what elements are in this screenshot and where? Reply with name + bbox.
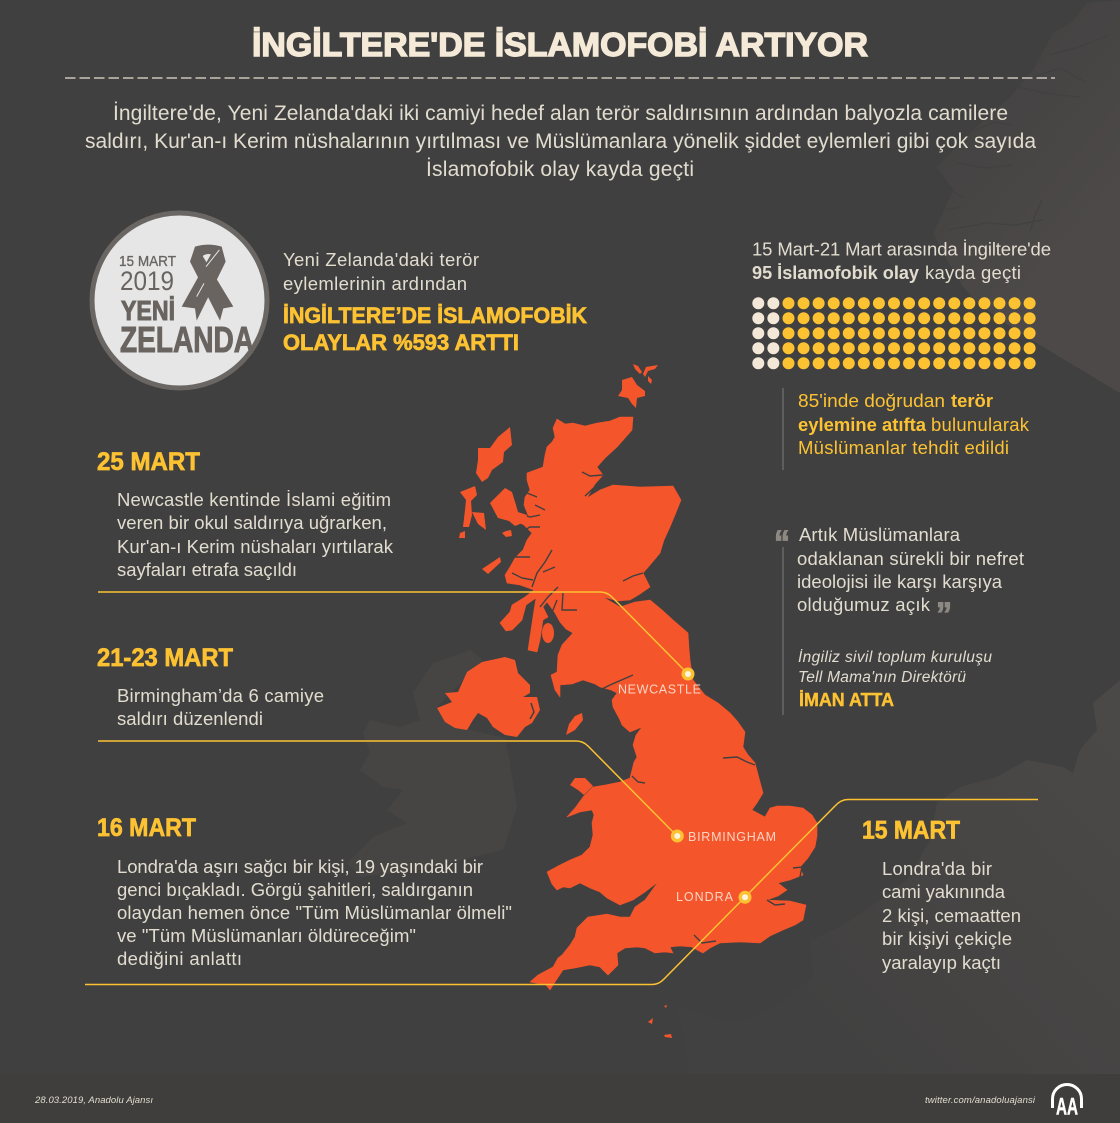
icon: opening quote mark: “ bbox=[774, 524, 790, 562]
map: Channel Islands bbox=[648, 1005, 672, 1038]
background map: continental Europe bbox=[677, 680, 1120, 1074]
event: 15 March: yaralayıp kaçtı bbox=[882, 952, 1001, 973]
statistic note: 85 incidents bbox=[798, 390, 1030, 458]
statistic note: 85 incidents: 85'inde doğrudan bbox=[798, 390, 945, 411]
background map: Norway bbox=[933, 0, 1120, 393]
map: inlets bbox=[510, 472, 802, 943]
connector line: Newcastle bbox=[98, 592, 688, 674]
event: 21-23 March: saldırı düzenlendi bbox=[117, 708, 263, 729]
headline: Yeni Zelanda effect: OLAYLAR %593 ARTTI bbox=[283, 330, 519, 355]
statistic note: 85 incidents: eylemine atıfta bbox=[798, 414, 927, 435]
statistic text: 95 incidents: 15 Mart-21 Mart arasında İngiltere'de bbox=[752, 238, 1051, 260]
statistic note: 85 incidents: bulunularak bbox=[931, 414, 1030, 435]
headline: Yeni Zelanda effect: İNGİLTERE’DE İSLAMOFOBİK bbox=[283, 303, 587, 328]
footer: twitter handle: twitter.com/anadoluajansi bbox=[925, 1095, 1036, 1106]
intro text: saldırı, Kur'an-ı Kerim nüshalarının yırtılması ve Müslümanlara yönelik şiddet eylemleri gibi çok sayıda bbox=[85, 130, 1036, 153]
marker: London: LONDRA bbox=[676, 890, 734, 904]
event: 16 March: olaydan hemen önce "Tüm Müslümanlar ölmeli" bbox=[117, 902, 512, 923]
event: 16 March: genci bıçakladı. Görgü şahitleri, saldırganın bbox=[117, 879, 473, 900]
statistic note: 85 incidents: Müslümanlar tehdit edildi bbox=[798, 437, 1009, 458]
badge: Yeni Zelanda bbox=[92, 213, 267, 388]
quote: Iman Atta bbox=[774, 524, 1024, 715]
event: 21-23 March: 21-23 MART bbox=[97, 644, 233, 672]
background map: Ireland bbox=[347, 650, 517, 877]
map: Shetland bbox=[633, 364, 658, 384]
headline: Yeni Zelanda effect: Yeni Zelanda'daki terör bbox=[283, 249, 479, 270]
event: 15 March: cami yakınında bbox=[882, 881, 1006, 902]
event: 25 March: Newcastle kentinde İslami eğitim bbox=[117, 489, 391, 510]
statistic text: 95 incidents: kayda geçti bbox=[925, 262, 1021, 283]
event: 16 March: 16 MART bbox=[97, 814, 196, 842]
badge: Yeni Zelanda: ZELANDA bbox=[120, 319, 254, 360]
event: 25 March: 25 MART bbox=[97, 448, 200, 476]
marker: Newcastle: NEWCASTLE bbox=[618, 682, 701, 696]
event: 15 March: 2 kişi, cemaatten bbox=[882, 905, 1021, 926]
map: United Kingdom bbox=[437, 364, 817, 1038]
map: Arran bbox=[542, 623, 554, 643]
quote: Iman Atta: Artık Müslümanlara bbox=[799, 524, 961, 545]
quote: Iman Atta: olduğumuz açık bbox=[797, 594, 931, 615]
statistic note: 85 incidents: terör bbox=[951, 390, 993, 411]
map: Orkney bbox=[618, 377, 645, 408]
dot chart: 95 incidents bbox=[758, 303, 1031, 363]
map: Outer Hebrides bbox=[459, 427, 512, 538]
event: 21-23 March bbox=[97, 644, 324, 729]
event: 25 March bbox=[97, 448, 394, 580]
event: 21-23 March: Birmingham’da 6 camiye bbox=[117, 685, 324, 706]
map: Great Britain mainland bbox=[500, 417, 817, 990]
badge: Yeni Zelanda: YENİ bbox=[121, 295, 175, 326]
statistic text: 95 incidents: 95 İslamofobik olay bbox=[752, 262, 920, 283]
map: Isle of Man bbox=[566, 713, 583, 735]
quote: Iman Atta: İngiliz sivil toplum kuruluşu bbox=[798, 649, 992, 666]
badge: Yeni Zelanda: 2019 bbox=[120, 266, 174, 296]
marker: Birmingham: BIRMINGHAM bbox=[688, 830, 776, 844]
connector line: Birmingham bbox=[98, 741, 677, 836]
icon: closing quote mark: ” bbox=[936, 596, 952, 634]
badge: Yeni Zelanda: 15 MART bbox=[119, 253, 176, 270]
event: 16 March: dediğini anlattı bbox=[117, 948, 242, 969]
headline: Yeni Zelanda effect: eylemlerinin ardından bbox=[283, 273, 467, 294]
event: 25 March: Kur'an-ı Kerim nüshaları yırtılarak bbox=[117, 536, 394, 557]
event: 16 March: ve "Tüm Müslümanları öldüreceğim" bbox=[117, 925, 416, 946]
logo: Anadolu Ajansi bbox=[1052, 1084, 1082, 1120]
title: İNGİLTERE'DE İSLAMOFOBİ ARTIYOR bbox=[252, 26, 868, 63]
map: Anglesey bbox=[570, 778, 593, 795]
event: 15 March bbox=[862, 816, 1021, 973]
logo: Anadolu Ajansi: AA bbox=[1056, 1094, 1078, 1120]
quote: Iman Atta: odaklanan sürekli bir nefret bbox=[797, 548, 1024, 569]
event: 25 March: veren bir okul saldırıya uğrarken, bbox=[117, 512, 387, 533]
map: Skye and west islands bbox=[472, 488, 527, 574]
quote: Iman Atta: İMAN ATTA bbox=[799, 690, 894, 710]
event: 15 March: 15 MART bbox=[862, 816, 960, 844]
map: Northern Ireland bbox=[437, 657, 540, 737]
footer band bbox=[0, 1074, 1120, 1123]
footer: date and source: 28.03.2019, Anadolu Ajansı bbox=[34, 1095, 153, 1106]
event: 15 March: Londra'da bir bbox=[882, 858, 992, 879]
statistic text: 95 incidents bbox=[752, 238, 1051, 283]
marker: Newcastle bbox=[618, 668, 701, 696]
intro text: İngiltere'de, Yeni Zelanda'daki iki camiyi hedef alan terör saldırısının ardından balyozla camilere bbox=[113, 102, 1008, 125]
quote: Iman Atta: Tell Mama'nın Direktörü bbox=[798, 669, 966, 686]
quote: Iman Atta: ideolojisi ile karşı karşıya bbox=[797, 571, 1003, 592]
event: 16 March bbox=[97, 814, 512, 969]
icon: ribbon bbox=[182, 245, 233, 321]
intro text bbox=[85, 102, 1036, 181]
connector line: London bbox=[85, 800, 1038, 984]
event: 16 March: Londra'da aşırı sağcı bir kişi, 19 yaşındaki bir bbox=[117, 856, 483, 877]
headline: Yeni Zelanda effect bbox=[283, 249, 587, 355]
event: 15 March: bir kişiyi çekiçle bbox=[882, 928, 1012, 949]
intro text: İslamofobik olay kayda geçti bbox=[426, 158, 694, 181]
event: 25 March: sayfaları etrafa saçıldı bbox=[117, 559, 297, 580]
